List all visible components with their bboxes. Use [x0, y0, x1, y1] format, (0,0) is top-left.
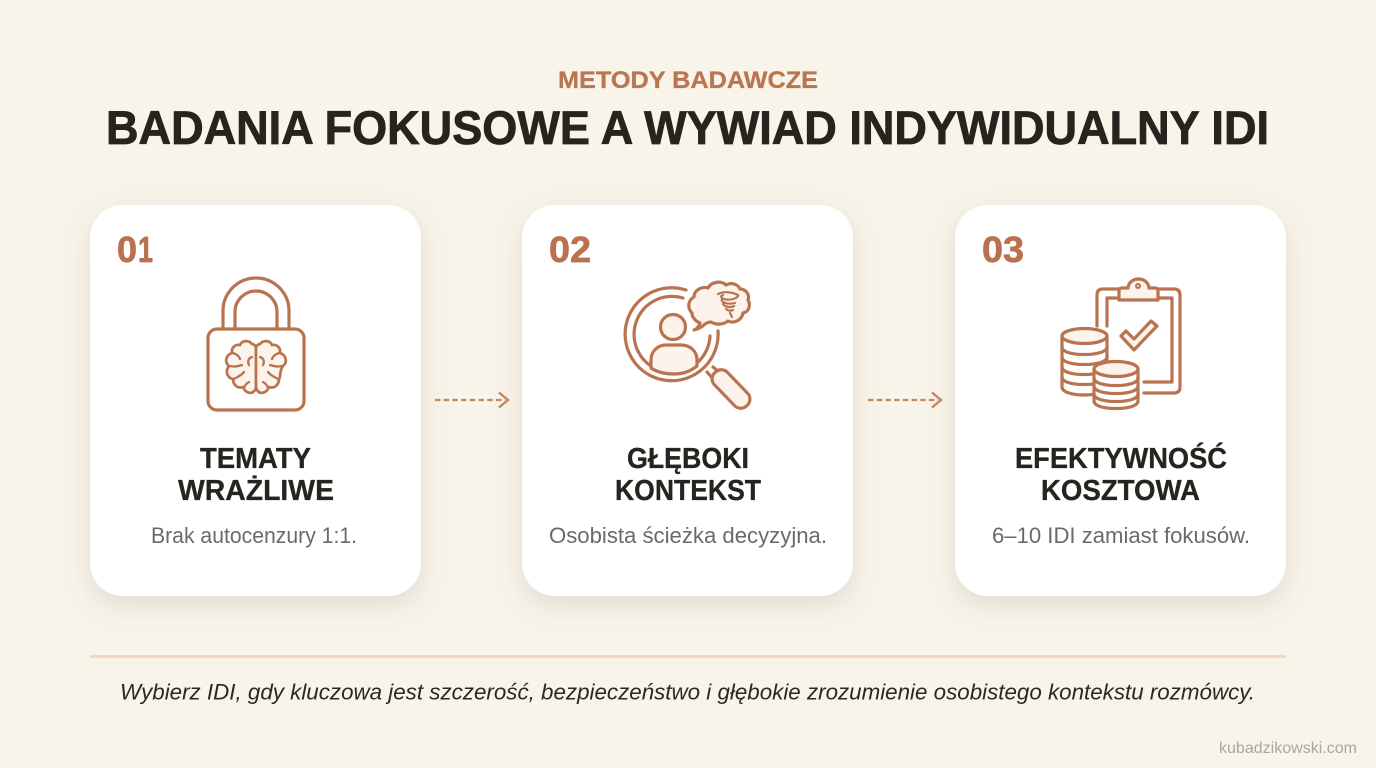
description: Osobista ścieżka decyzyjna.: [549, 523, 827, 548]
number 02: 02: [549, 229, 591, 270]
panel: temat wrażliwe: WRAŻLIWE: [178, 475, 334, 507]
heading: GŁĘBOKI: [627, 443, 749, 475]
panel: głęboki kontekst: KONTEKST: [615, 475, 761, 507]
panel: głęboki kontekst: [522, 205, 853, 596]
panel: efektywność kosztowa: [955, 205, 1286, 596]
number 03: 03: [982, 229, 1024, 270]
panel: efektywność kosztowa: KOSZTOWA: [1041, 475, 1200, 507]
description: Brak autocenzury 1:1.: [151, 523, 357, 548]
panel: temat wrażliwe: [90, 205, 421, 596]
heading: EFEKTYWNOŚĆ: [1015, 441, 1227, 475]
conclusion text: Wybierz IDI, gdy kluczowa jest szczerość, bezpieczeństwo i głębokie zrozumienie osobistego kontekstu rozmówcy.: [120, 680, 1255, 704]
description: 6–10 IDI zamiast fokusów.: [992, 523, 1250, 548]
number 01: 0: [117, 229, 137, 270]
eyebrow heading: METODY BADAWCZE: [558, 67, 818, 94]
heading: TEMATY: [200, 443, 311, 475]
arrow 2 to 3: [868, 392, 941, 408]
number 01: 1: [138, 229, 153, 270]
watermark: kubadzikowski.com: [1219, 740, 1357, 757]
icon: clipboard and coins: [1062, 279, 1180, 408]
title: BADANIA FOKUSOWE A WYWIAD INDYWIDUALNY IDI: [106, 101, 1269, 154]
icon: magnifier with person and thought cloud: [625, 282, 753, 412]
number 01: [117, 229, 153, 270]
icon: padlock with brain: [208, 278, 304, 410]
arrow 1 to 2: [435, 392, 508, 408]
